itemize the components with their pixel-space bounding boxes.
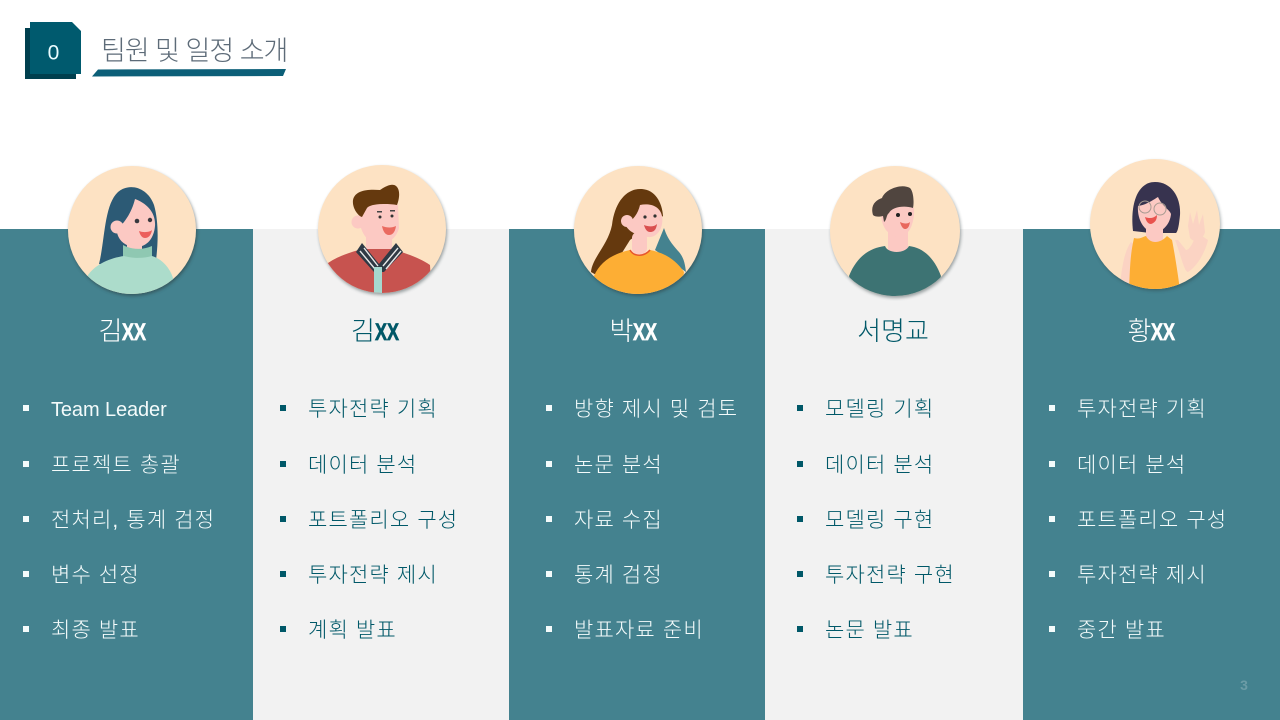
icon: section number badge: 0 (48, 42, 59, 64)
text block: member 2 roles: 투자전략 제시 (308, 564, 438, 587)
heading: member 3 name: XX (633, 319, 657, 346)
heading: member 1 name: 김 (99, 316, 122, 346)
title: 팀원 및 일정 소개 (101, 36, 287, 66)
heading: member 5 name (1128, 316, 1176, 346)
panel: column 5 background (1023, 229, 1280, 720)
page number: 3 (1240, 677, 1248, 693)
text block: member 1 roles: 전처리, 통계 검정 (51, 509, 215, 532)
text block: member 5 roles: 데이터 분석 (1077, 454, 1186, 477)
text block: member 5 roles (1049, 398, 1227, 642)
text block: member 2 roles: 데이터 분석 (308, 454, 417, 477)
text block: member 4 roles: 투자전략 구현 (825, 564, 955, 587)
heading: member 1 name (99, 316, 146, 346)
icon: avatar woman with green sweater (66, 166, 200, 298)
text block: member 1 roles: 변수 선정 (51, 564, 140, 587)
panel: column 2 background (253, 229, 509, 720)
text block: member 2 roles: 투자전략 기획 (308, 398, 438, 421)
text block: member 4 roles: 모델링 구현 (825, 509, 934, 532)
text block: member 2 roles: 계획 발표 (308, 619, 397, 642)
text block: member 5 roles: 투자전략 기획 (1077, 398, 1207, 421)
heading: member 2 name (351, 316, 400, 346)
icon: avatar woman with yellow shirt (573, 166, 705, 298)
heading: member 1 name: XX (122, 319, 146, 346)
heading: member 2 name: XX (375, 319, 399, 346)
text block: member 2 roles: 포트폴리오 구성 (308, 509, 458, 532)
text block: member 3 roles: 논문 분석 (574, 454, 663, 477)
icon: avatar man with green shirt (829, 166, 963, 300)
text block: member 3 roles: 방향 제시 및 검토 (574, 398, 738, 421)
panel: column 3 background (509, 229, 765, 720)
text block: member 3 roles: 자료 수집 (574, 509, 663, 532)
heading: member 5 name: XX (1151, 319, 1175, 346)
icon: avatar woman with glasses waving (1089, 159, 1223, 292)
heading: member 4 name: 서명교 (857, 316, 929, 346)
title underline bar (92, 69, 286, 76)
text block: member 3 roles: 발표자료 준비 (574, 619, 704, 642)
text block: member 1 roles: 최종 발표 (51, 619, 140, 642)
text block: member 3 roles: 통계 검정 (574, 564, 663, 587)
text block: member 4 roles (797, 398, 955, 642)
text block: member 5 roles: 포트폴리오 구성 (1077, 509, 1227, 532)
text block: member 5 roles: 중간 발표 (1077, 619, 1166, 642)
panel: column 4 background (765, 229, 1023, 720)
text block: member 4 roles: 데이터 분석 (825, 454, 934, 477)
text block: member 4 roles: 모델링 기획 (825, 398, 934, 421)
heading: member 3 name: 박 (610, 316, 633, 346)
text block: member 5 roles: 투자전략 제시 (1077, 564, 1207, 587)
icon: avatar man with red hanbok (317, 165, 449, 297)
panel: column 1 background (0, 229, 253, 720)
heading: member 3 name (610, 316, 658, 346)
text block: member 1 roles (23, 399, 215, 642)
text block: member 1 roles: 프로젝트 총괄 (51, 454, 181, 477)
heading: member 5 name: 황 (1128, 316, 1151, 346)
text block: member 4 roles: 논문 발표 (825, 619, 914, 642)
icon: section number badge (25, 22, 81, 79)
text block: member 3 roles (546, 398, 738, 642)
text block: member 2 roles (280, 398, 458, 642)
heading: member 2 name: 김 (351, 316, 375, 346)
text block: member 1 roles: Team Leader (51, 399, 167, 421)
